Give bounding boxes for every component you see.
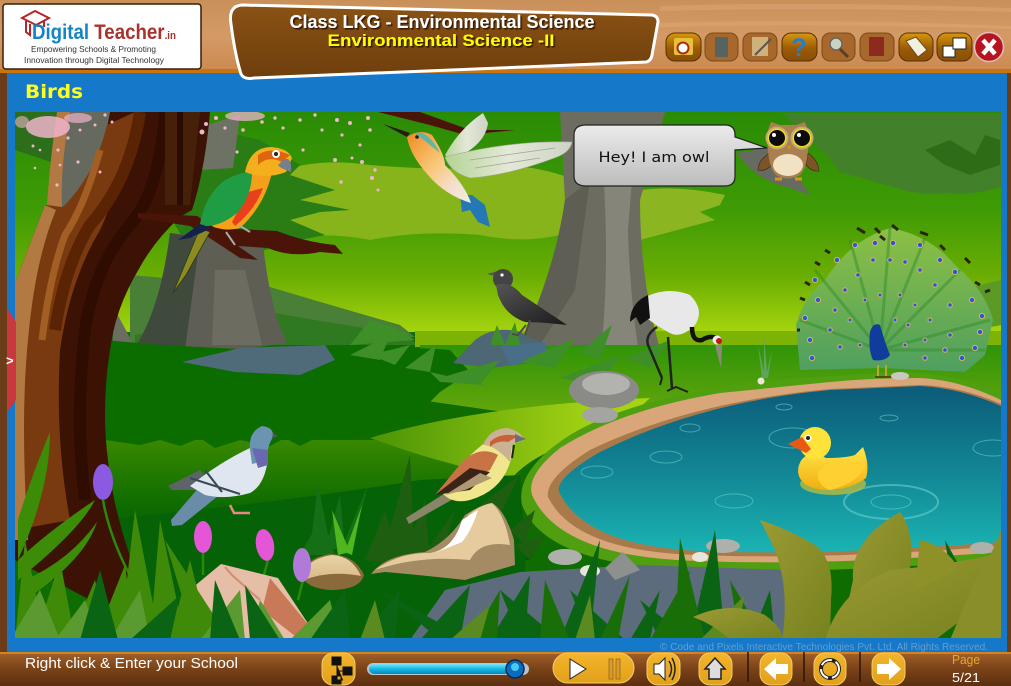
- water ripples: [581, 404, 1011, 519]
- distant hills: [130, 275, 415, 345]
- parrot tail: [173, 228, 210, 293]
- button: search: [822, 33, 855, 61]
- button: book: [899, 33, 933, 61]
- sparrow head: [483, 428, 524, 462]
- top-right canopy: [783, 113, 1001, 194]
- logo panel: [3, 4, 201, 69]
- crane tail: [630, 295, 650, 325]
- crane legs: [647, 327, 672, 388]
- duck body: [798, 447, 867, 490]
- page label: Page: [952, 652, 980, 667]
- lime patch centre-left: [285, 162, 570, 240]
- school prompt: Right click & Enter your School: [25, 656, 238, 672]
- crane: [630, 291, 722, 392]
- button: close: [974, 32, 1004, 62]
- grey rocks: [569, 371, 639, 423]
- button: dictionary: [860, 33, 894, 61]
- scene background: [15, 112, 1001, 638]
- toolbar buttons: [666, 32, 1004, 62]
- left slide-out tab: >: [6, 353, 14, 368]
- button: help: [782, 33, 817, 62]
- trunk stripe light: [42, 150, 100, 340]
- trunk dark base: [15, 112, 210, 620]
- button: index: [666, 33, 701, 61]
- subtitle: Environmental Science -II: [328, 31, 554, 50]
- hummingbird body: [407, 132, 471, 203]
- tree branches: [138, 112, 515, 260]
- copyright: © Code and Pixels Interactive Technologies Pvt. Ltd. All Rights Reserved.: [660, 642, 988, 653]
- peacock body: [869, 324, 890, 360]
- hummingbird upper wing: [445, 113, 488, 160]
- lower lawn: [105, 440, 530, 560]
- owl wings: [758, 153, 819, 171]
- dark mound: [105, 340, 470, 448]
- pond sand rim: [531, 378, 1001, 562]
- title: Class LKG - Environmental Science: [290, 12, 594, 32]
- owl eyes: [766, 126, 788, 150]
- play pause pill: [553, 653, 634, 683]
- trunk tan branch: [47, 112, 70, 207]
- lawn: [105, 340, 1001, 640]
- pink rock: [191, 564, 311, 640]
- icon: graduation cap: [22, 11, 49, 35]
- trunk stripe deep: [80, 112, 165, 500]
- pigeon neck and head: [250, 426, 273, 464]
- tulip pink right: [253, 528, 277, 562]
- parrot body: [212, 172, 272, 230]
- small tan rock: [302, 554, 364, 590]
- owl body: [768, 122, 808, 178]
- pond water: [559, 386, 1001, 552]
- pink blossoms: [15, 111, 380, 192]
- button: notes: [743, 33, 777, 61]
- button: pdf: [705, 33, 738, 61]
- tulip pink left: [194, 521, 212, 553]
- scene illustration: [15, 112, 1001, 638]
- sparrow: [406, 428, 526, 524]
- duck head: [799, 427, 831, 459]
- sound button: [647, 653, 680, 685]
- pigeon lower tail: [171, 486, 218, 526]
- speech bubble: [574, 125, 767, 186]
- parrot wing: [200, 172, 252, 226]
- pond grass rim: [521, 372, 1001, 571]
- blue-grey rocks: [182, 330, 548, 375]
- hummingbird: [383, 113, 572, 227]
- pigeon: [168, 426, 278, 526]
- tulip stems: [103, 500, 303, 600]
- pigeon body: [190, 448, 268, 497]
- pond: [521, 372, 1011, 571]
- trunk mid stripes: [15, 112, 135, 530]
- duck: [788, 427, 867, 495]
- logo tagline second line: Innovation through Digital Technology: [24, 55, 165, 65]
- sparrow wing: [435, 451, 498, 495]
- peacock eyes: [802, 240, 985, 361]
- canopy behind parrot: [175, 125, 350, 250]
- grey trunk behind main tree: [60, 112, 115, 212]
- main tree trunk: [15, 112, 210, 620]
- upper right lawn: [420, 345, 1001, 420]
- trunk tan edge: [15, 205, 56, 540]
- progress slider: [367, 660, 529, 678]
- next button: [872, 653, 905, 685]
- foreground olive foliage: [693, 512, 1001, 640]
- peacock stones: [891, 372, 909, 380]
- peacock feather tips: [797, 225, 990, 330]
- duck reflection: [800, 473, 866, 495]
- refresh button: [814, 653, 846, 685]
- tulips: [93, 464, 311, 600]
- crane neck: [692, 327, 716, 340]
- right bush: [960, 280, 1001, 330]
- speech text: Hey! I am owl: [598, 150, 710, 166]
- hummingbird beak: [383, 124, 410, 137]
- tulip purple: [93, 464, 113, 500]
- lime lawn path: [370, 398, 650, 480]
- sparrow body: [440, 434, 512, 501]
- crane body: [640, 291, 699, 335]
- background tree centre: [520, 112, 672, 385]
- sparrow tail: [406, 490, 455, 524]
- pigeon upper tail: [168, 470, 215, 490]
- peacock fan: [796, 228, 993, 372]
- page number: 5/21: [952, 670, 980, 685]
- button: help: ?: [791, 34, 807, 62]
- tree-base leaves: [18, 432, 97, 600]
- owl branch: [737, 148, 810, 195]
- back button: [760, 653, 792, 685]
- logo wordmark: Digital Teacher.in: [32, 21, 176, 44]
- tan rock under sparrow: [302, 503, 515, 590]
- background tree left: [112, 115, 287, 356]
- top wooden header bar: [0, 0, 1011, 73]
- button: fullscreen: [937, 33, 972, 61]
- grass behind sparrow: [300, 455, 545, 565]
- mid-ground grass clumps: [350, 322, 670, 385]
- lime patch centre-right: [640, 188, 725, 240]
- title plaque: [230, 5, 658, 78]
- tree-menu button: [322, 653, 355, 685]
- home button: [699, 653, 732, 685]
- tulip lilac: [293, 548, 311, 582]
- peacock: [796, 225, 993, 380]
- owl: [758, 122, 819, 179]
- small reed: [758, 336, 772, 384]
- dark foliage top-left: [15, 112, 110, 165]
- logo tagline: Empowering Schools & Promoting: [31, 44, 156, 54]
- distant grey-blue ground rock: [410, 565, 790, 640]
- crow: [487, 269, 567, 335]
- hummingbird large wing: [445, 142, 572, 178]
- foreground grass: [10, 510, 1000, 640]
- hummingbird tail: [460, 195, 490, 227]
- bottom wooden bar: [0, 652, 1011, 686]
- panel heading: Birds: [25, 81, 83, 103]
- parrot: [173, 147, 292, 293]
- pebbles: [548, 539, 994, 580]
- left slide-out tab: [6, 308, 16, 412]
- parrot head: [245, 147, 292, 176]
